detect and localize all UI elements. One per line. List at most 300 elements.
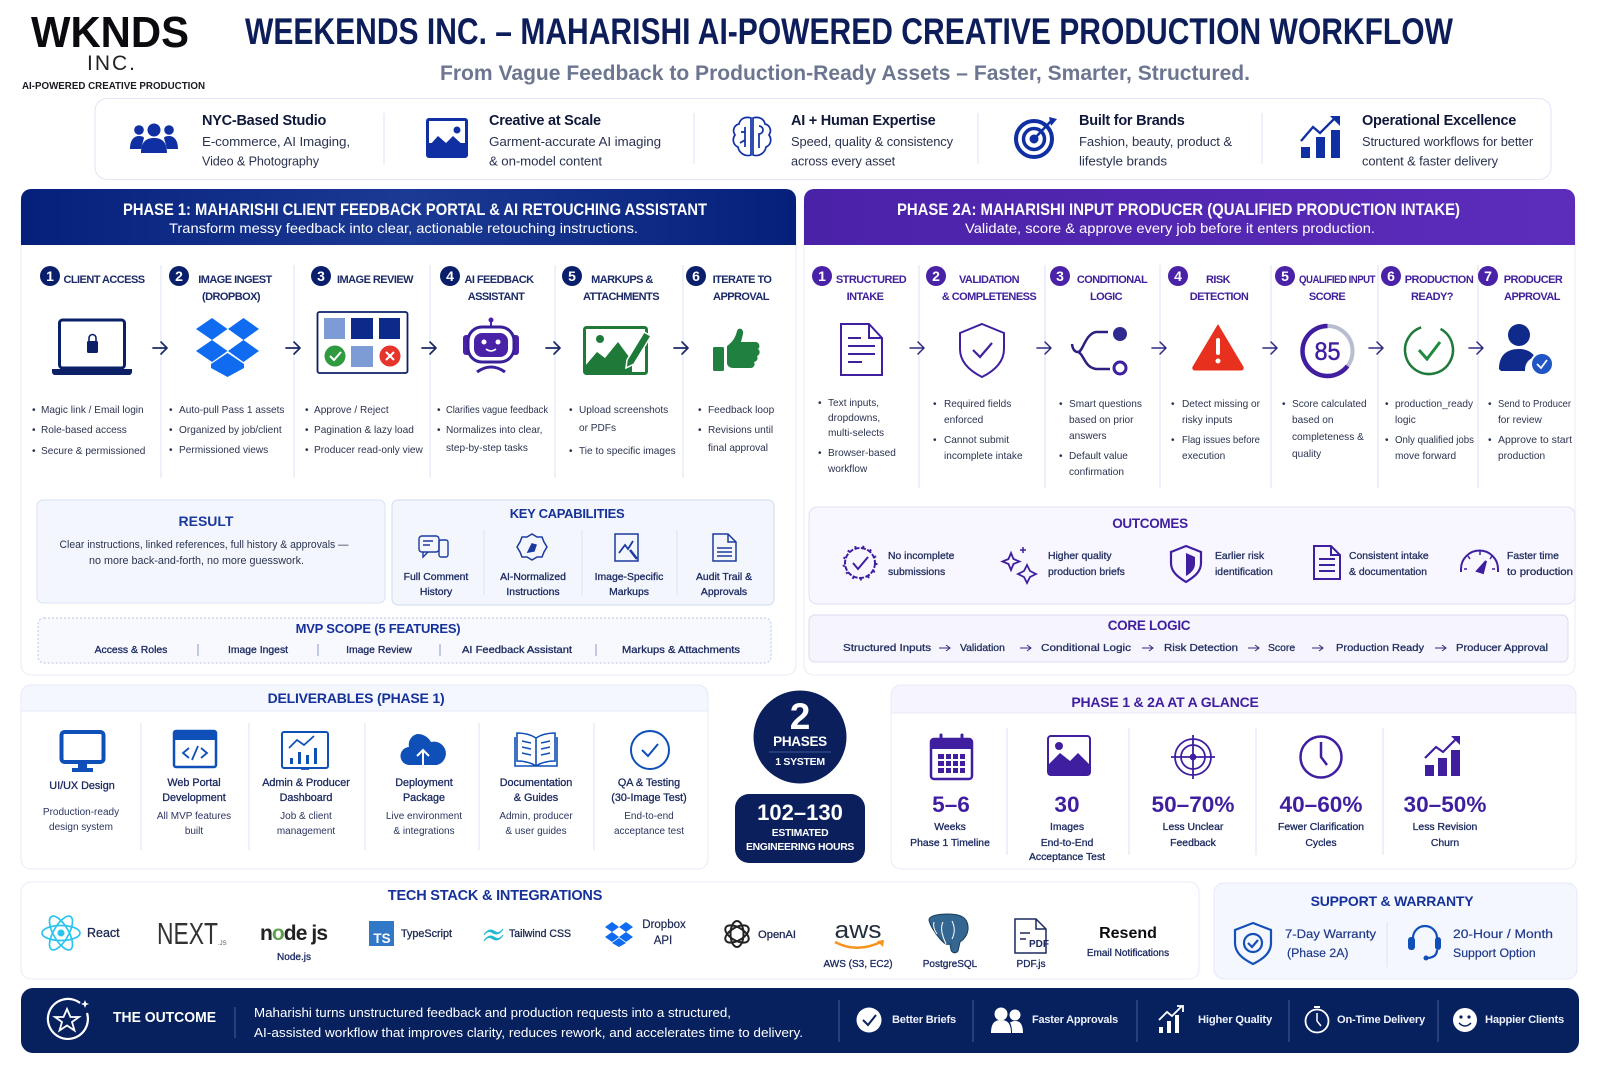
- deliverable: admin and producer dashboard: Job & client: [280, 811, 332, 822]
- stat: 30 images: [1029, 736, 1105, 863]
- outcome statement: AI-assisted workflow that improves clarity, reduces rework, and accelerates time to delivery.: [254, 1025, 803, 1040]
- core logic box: [809, 615, 1568, 662]
- step 2: image ingest: 2: [175, 268, 183, 284]
- producer approval features: for review: [1498, 415, 1542, 426]
- producer approval features: •: [1488, 399, 1492, 410]
- client access features: Role-based access: [41, 425, 127, 436]
- stat: 50-70 percent: [1152, 735, 1234, 849]
- text: built for brands: Fashion, beauty, product &: [1079, 135, 1233, 149]
- AI feedback features: Normalizes into clear,: [446, 425, 542, 436]
- step 2: image ingest: [169, 266, 284, 456]
- score features: [1282, 399, 1367, 460]
- logo: AWS: AWS (S3, EC2): [823, 959, 893, 970]
- structured intake features: [818, 398, 896, 475]
- deliverable: QA and testing: [611, 731, 687, 837]
- result box: RESULT: [179, 513, 234, 529]
- AI feedback features: step-by-step tasks: [446, 443, 528, 454]
- core logic box: Conditional Logic: [1041, 643, 1131, 654]
- stat: 50-70 percent: Feedback: [1170, 838, 1217, 849]
- image review features: •: [305, 445, 309, 456]
- logo: INC.: [87, 52, 137, 75]
- logo: PDF.js: [1015, 919, 1049, 970]
- step 4: AI feedback assistant: [437, 266, 549, 454]
- deliverable: documentation and guides: Documentation: [500, 777, 572, 789]
- conditional logic features: answers: [1069, 431, 1107, 442]
- stat: 50-70 percent: Less Unclear: [1163, 822, 1224, 833]
- support option: Support Option: [1453, 946, 1536, 960]
- support option: 20-Hour / Month: [1453, 927, 1553, 941]
- step 6: production ready: READY?: [1411, 291, 1454, 303]
- logo: Tailwind CSS: Tailwind CSS: [509, 928, 571, 940]
- text: operational excellence: content & faster delivery: [1362, 154, 1499, 168]
- text: built for brands: Built for Brands: [1079, 113, 1185, 129]
- image review features: Approve / Reject: [314, 405, 389, 416]
- badge: 2 phases 1 system: 1 SYSTEM: [775, 756, 825, 768]
- arrow: [153, 342, 167, 354]
- phase 1 header: [21, 189, 796, 245]
- step 6: iterate to approval: [686, 266, 775, 454]
- benefit: better briefs: [856, 1008, 956, 1032]
- structured intake features: workflow: [827, 464, 868, 475]
- icon: brain: [733, 117, 771, 156]
- panel: phase 1: [21, 189, 796, 675]
- step 3: image review: IMAGE REVIEW: [337, 274, 414, 286]
- iterate features: Revisions until: [708, 425, 773, 436]
- logo: Node.js: node js: [260, 922, 328, 945]
- production ready features: Only qualified jobs: [1395, 435, 1474, 446]
- step 1: client access: [32, 266, 145, 457]
- logo: TypeScript: TypeScript: [401, 928, 452, 940]
- text: AI plus human expertise: Speed, quality & consistency: [791, 135, 954, 149]
- icon: shield: [960, 324, 1004, 377]
- step 3: conditional logic: 3: [1056, 268, 1064, 284]
- text: operational excellence: [1362, 113, 1533, 168]
- core logic box: Validation: [960, 643, 1005, 654]
- icon: dropbox: [196, 318, 259, 377]
- validation features: •: [933, 399, 937, 410]
- step 3: conditional logic: CONDITIONAL: [1077, 274, 1148, 286]
- badge: estimated engineering hours: ENGINEERING HOURS: [746, 842, 854, 853]
- AI feedback features: •: [437, 405, 441, 416]
- phase 2A header: Validate, score & approve every job before it enters production.: [965, 220, 1375, 236]
- markups features: [569, 405, 676, 457]
- result box: no more back-and-forth, no more guesswork.: [89, 555, 304, 567]
- icon: image: [426, 118, 468, 158]
- stat: 40-60 percent: Cycles: [1305, 838, 1337, 849]
- step 4: risk detection: 4: [1174, 268, 1182, 284]
- deliverable: deployment package: & integrations: [393, 826, 455, 837]
- deliverable: web portal development: [157, 731, 231, 837]
- image review features: •: [305, 405, 309, 416]
- step 2: image ingest: (DROPBOX): [202, 291, 261, 303]
- warranty: 7-Day Warranty: [1285, 927, 1377, 941]
- step 6: iterate to approval: 6: [692, 268, 700, 284]
- deliverable: deployment package: Deployment: [395, 777, 453, 789]
- structured intake features: •: [818, 448, 822, 459]
- step 5: markups and attachments: ATTACHMENTS: [583, 291, 659, 303]
- arrow: [1263, 342, 1277, 354]
- icon: green check circle: [1396, 317, 1462, 383]
- score features: Score calculated: [1292, 399, 1367, 410]
- outcome: earlier risk identification: Earlier risk: [1215, 551, 1265, 562]
- conditional logic features: based on prior: [1069, 415, 1134, 426]
- text: AI plus human expertise: AI + Human Expertise: [791, 113, 936, 129]
- outcome: higher quality production briefs: [1002, 547, 1125, 583]
- conditional logic features: Smart questions: [1069, 399, 1142, 410]
- outcome statement: [254, 1005, 803, 1040]
- markups features: •: [569, 405, 573, 416]
- arrow: [674, 342, 688, 354]
- capability: audit trail and approvals: [696, 534, 752, 598]
- support option: [1408, 926, 1553, 960]
- logo: Resend: [1087, 925, 1169, 959]
- logo: Dropbox API: [605, 919, 686, 947]
- text: built for brands: lifestyle brands: [1079, 154, 1167, 168]
- stat: 5-6 weeks: [910, 735, 990, 849]
- outcome: faster time to production: [1461, 550, 1573, 578]
- deliverable: admin and producer dashboard: management: [277, 826, 335, 837]
- risk detection features: risky inputs: [1182, 415, 1232, 426]
- text: NYC-based studio: Video & Photography: [202, 154, 320, 168]
- logo: Tailwind CSS: [484, 928, 571, 941]
- panel: deliverables: [21, 685, 708, 869]
- core logic box: Risk Detection: [1164, 643, 1238, 654]
- step 5: qualified input score: SCORE: [1309, 291, 1345, 303]
- production ready features: move forward: [1395, 451, 1456, 462]
- deliverable: QA and testing: (30-Image Test): [611, 792, 687, 804]
- image ingest features: •: [169, 445, 173, 456]
- production ready features: production_ready: [1395, 399, 1474, 410]
- step 5: qualified input score: [1275, 266, 1376, 460]
- icon: growth chart: [1301, 116, 1340, 158]
- markups features: •: [569, 446, 573, 457]
- logo: AWS: aws: [834, 917, 882, 944]
- benefit: higher quality: [1159, 1006, 1273, 1033]
- outcome: faster time to production: Faster time: [1507, 551, 1559, 562]
- step 6: iterate to approval: ITERATE TO: [713, 274, 772, 286]
- logo: TypeScript: TS: [373, 931, 391, 946]
- capability: audit trail and approvals: Approvals: [701, 587, 747, 598]
- outcome: higher quality production briefs: production briefs: [1048, 567, 1125, 578]
- step 3: conditional logic: [1050, 266, 1148, 478]
- text: AI plus human expertise: [791, 113, 954, 168]
- image ingest features: •: [169, 405, 173, 416]
- client access features: Secure & permissioned: [41, 446, 145, 457]
- conditional logic features: •: [1059, 451, 1063, 462]
- image ingest features: Organized by job/client: [179, 425, 282, 436]
- capability: AI-normalized instructions: Instructions: [506, 587, 560, 598]
- text: NYC-based studio: [202, 113, 350, 168]
- capability: AI-normalized instructions: AI-Normalized: [500, 572, 566, 583]
- step 3: image review: 3: [317, 268, 325, 284]
- text: NYC-based studio: E-commerce, AI Imaging,: [202, 135, 350, 149]
- deliverable: deployment package: [386, 734, 462, 837]
- icon: laptop: [52, 320, 132, 375]
- iterate features: •: [698, 425, 702, 436]
- production ready features: •: [1385, 435, 1389, 446]
- MVP scope: AI Feedback Assistant: [462, 645, 572, 656]
- deliverable: web portal development: Development: [162, 792, 226, 804]
- outcome: faster time to production: to production: [1507, 567, 1573, 578]
- subtitle: From Vague Feedback to Production-Ready Assets – Faster, Smarter, Structured.: [440, 62, 1250, 85]
- step 4: AI feedback assistant: AI FEEDBACK: [464, 274, 534, 286]
- text: operational excellence: Operational Excellence: [1362, 113, 1516, 129]
- production ready features: •: [1385, 399, 1389, 410]
- stat: 30 images: 30: [1054, 792, 1080, 817]
- panel: the outcome: [21, 988, 1579, 1053]
- step 4: risk detection: RISK: [1206, 274, 1231, 286]
- text: creative at scale: [489, 113, 661, 168]
- image ingest features: •: [169, 425, 173, 436]
- benefit: on-time delivery: On-Time Delivery: [1337, 1014, 1426, 1026]
- panel: deliverables: DELIVERABLES (PHASE 1): [268, 690, 444, 706]
- step 6: production ready: [1381, 266, 1474, 462]
- logo: Node.js: [260, 922, 328, 963]
- deliverable: admin and producer dashboard: [262, 732, 350, 837]
- risk detection features: •: [1171, 399, 1175, 410]
- step 4: risk detection: DETECTION: [1190, 291, 1249, 303]
- logo: AWS: [823, 917, 893, 970]
- validation features: enforced: [944, 415, 983, 426]
- capability: full comment history: [404, 536, 468, 598]
- conditional logic features: Default value: [1069, 451, 1128, 462]
- image review features: •: [305, 425, 309, 436]
- outcomes box: OUTCOMES: [1112, 516, 1188, 531]
- MVP scope: Markups & Attachments: [622, 645, 740, 656]
- icon: approved person: [1499, 324, 1553, 375]
- validation features: Required fields: [944, 399, 1011, 410]
- benefit: on-time delivery: [1306, 1007, 1426, 1032]
- logo: Dropbox API: API: [654, 935, 672, 947]
- result box: [37, 500, 385, 603]
- text: NYC-based studio: NYC-Based Studio: [202, 113, 326, 129]
- deliverable: UI/UX design: [43, 732, 119, 833]
- step 1: structured intake: INTAKE: [847, 291, 884, 303]
- arrow: [1469, 342, 1483, 354]
- panel: company highlights: [95, 98, 1551, 180]
- stat: 30 images: Images: [1050, 822, 1084, 833]
- panel: tech stack and integrations: [21, 882, 1199, 979]
- deliverable: QA and testing: QA & Testing: [618, 777, 680, 789]
- step 2: validation and completeness: 2: [932, 268, 940, 284]
- icon: warning triangle: [1193, 325, 1243, 370]
- stat: 30-50 percent: Churn: [1431, 838, 1459, 849]
- AI feedback features: Clarifies vague feedback: [446, 405, 549, 416]
- producer approval features: [1488, 399, 1572, 462]
- stat: 30-50 percent: [1404, 736, 1486, 849]
- MVP scope: MVP SCOPE (5 FEATURES): [296, 621, 460, 636]
- producer approval features: •: [1488, 435, 1492, 446]
- step 6: production ready: 6: [1387, 268, 1395, 284]
- logo: PostgreSQL: [923, 914, 978, 970]
- step 7: producer approval: [1478, 266, 1572, 462]
- benefit: higher quality: Higher Quality: [1198, 1014, 1273, 1026]
- step 3: conditional logic: LOGIC: [1090, 291, 1123, 303]
- benefit: happier clients: [1453, 1008, 1564, 1032]
- image ingest features: [169, 405, 284, 456]
- score features: based on: [1292, 415, 1334, 426]
- iterate features: •: [698, 405, 702, 416]
- structured intake features: Browser-based: [828, 448, 896, 459]
- logo: WKNDS: [31, 8, 189, 57]
- logo: React: React: [87, 926, 120, 940]
- outcome: no incomplete submissions: [844, 546, 955, 580]
- deliverable: deployment package: Live environment: [386, 811, 462, 822]
- arrow: [1037, 342, 1051, 354]
- structured intake features: Text inputs,: [828, 398, 879, 409]
- badge: 2 phases 1 system: PHASES: [773, 734, 827, 749]
- phase 1 header: Transform messy feedback into clear, actionable retouching instructions.: [169, 220, 638, 236]
- phase 1 header: PHASE 1: MAHARISHI CLIENT FEEDBACK PORTAL & AI RETOUCHING ASSISTANT: [123, 200, 707, 219]
- stat: 40-60 percent: Fewer Clarification: [1278, 822, 1364, 833]
- validation features: [933, 399, 1023, 462]
- arrow: [422, 342, 436, 354]
- capability: image-specific markups: Markups: [609, 587, 649, 598]
- stat: 40-60 percent: 40–60%: [1280, 792, 1362, 817]
- validation features: •: [933, 435, 937, 446]
- producer approval features: Send to Producer: [1498, 399, 1572, 410]
- validation features: Cannot submit: [944, 435, 1009, 446]
- key capabilities: [392, 500, 774, 605]
- deliverable: UI/UX design: Production-ready: [43, 807, 119, 818]
- image review features: [305, 405, 424, 456]
- benefit: faster approvals: Faster Approvals: [1032, 1014, 1118, 1026]
- text: creative at scale: Creative at Scale: [489, 113, 601, 129]
- deliverable: QA and testing: End-to-end: [624, 811, 674, 822]
- icon: review grid: [318, 312, 408, 373]
- step 1: client access: CLIENT ACCESS: [63, 274, 145, 286]
- iterate features: final approval: [708, 443, 768, 454]
- logo: PDF.js: PDF: [1029, 939, 1049, 950]
- producer approval features: Approve to start: [1498, 435, 1572, 446]
- step 3: image review: [305, 266, 424, 456]
- MVP scope: Access & Roles: [95, 645, 167, 656]
- logo: OpenAI: OpenAI: [758, 929, 796, 941]
- outcome: consistent intake and documentation: & documentation: [1349, 567, 1427, 578]
- gauge: score 85: 85: [1314, 338, 1340, 366]
- structured intake features: •: [818, 398, 822, 409]
- outcome: no incomplete submissions: No incomplete: [888, 551, 955, 562]
- badge: estimated engineering hours: 102–130: [757, 800, 843, 825]
- result box: Clear instructions, linked references, full history & approvals —: [60, 539, 348, 551]
- outcomes box: [809, 507, 1575, 604]
- image ingest features: Permissioned views: [179, 445, 268, 456]
- panel: tech stack and integrations: TECH STACK & INTEGRATIONS: [388, 888, 603, 904]
- logo: Node.js: Node.js: [277, 952, 311, 963]
- core logic box: Production Ready: [1336, 643, 1425, 654]
- client access features: Magic link / Email login: [41, 405, 144, 416]
- conditional logic features: confirmation: [1069, 467, 1124, 478]
- arrow: [910, 342, 924, 354]
- risk detection features: •: [1171, 435, 1175, 446]
- step 2: validation and completeness: VALIDATION: [959, 274, 1020, 286]
- iterate features: Feedback loop: [708, 405, 775, 416]
- logo: TypeScript: [369, 921, 452, 946]
- outcome: higher quality production briefs: Higher quality: [1048, 551, 1112, 562]
- step 2: validation and completeness: & COMPLETENESS: [942, 291, 1036, 303]
- outcome: consistent intake and documentation: Consistent intake: [1349, 551, 1429, 562]
- text: creative at scale: & on-model content: [489, 154, 603, 168]
- outcome: consistent intake and documentation: [1314, 546, 1429, 579]
- MVP scope: [38, 618, 771, 663]
- stat: 5-6 weeks: 5–6: [932, 792, 970, 817]
- step 1: structured intake: STRUCTURED: [836, 274, 907, 286]
- deliverable: documentation and guides: & user guides: [505, 826, 567, 837]
- MVP scope: Image Ingest: [228, 645, 288, 656]
- outcome: earlier risk identification: [1171, 546, 1273, 582]
- text: operational excellence: Structured workflows for better: [1362, 135, 1533, 149]
- core logic box: Producer Approval: [1456, 643, 1548, 654]
- icon: star ring: [48, 999, 89, 1039]
- stat: 40-60 percent: [1278, 736, 1364, 849]
- deliverable: web portal development: Web Portal: [167, 777, 221, 789]
- step 5: markups and attachments: [562, 266, 676, 457]
- capability: AI-normalized instructions: [500, 534, 566, 598]
- logo: Resend: Email Notifications: [1087, 948, 1169, 959]
- panel: support and warranty: SUPPORT & WARRANTY: [1311, 893, 1474, 909]
- production ready features: logic: [1395, 415, 1416, 426]
- stat: 30 images: Acceptance Test: [1029, 852, 1105, 863]
- badge: 2 phases 1 system: [754, 690, 846, 784]
- deliverable: web portal development: All MVP features: [157, 811, 231, 822]
- client access features: [32, 405, 145, 457]
- deliverable: UI/UX design: UI/UX Design: [49, 780, 115, 792]
- markups features: Upload screenshots: [579, 405, 668, 416]
- icon: thumbs up: [713, 329, 760, 371]
- risk detection features: execution: [1182, 451, 1225, 462]
- icon: target: [1016, 117, 1057, 157]
- logo: Next.js: .JS: [218, 941, 227, 947]
- step 5: qualified input score: 5: [1281, 268, 1289, 284]
- production ready features: [1385, 399, 1474, 462]
- score features: completeness &: [1292, 432, 1364, 443]
- deliverable: admin and producer dashboard: Dashboard: [280, 792, 332, 804]
- deliverable: documentation and guides: & Guides: [514, 792, 559, 804]
- core logic box: Structured Inputs: [843, 643, 931, 654]
- icon: image with pen: [584, 328, 651, 374]
- step 2: validation and completeness: [926, 266, 1036, 462]
- panel: support and warranty: [1214, 883, 1577, 979]
- outcome statement: Maharishi turns unstructured feedback and production requests into a structured,: [254, 1005, 731, 1020]
- stat: 30-50 percent: 30–50%: [1404, 792, 1486, 817]
- benefit: faster approvals: [991, 1008, 1118, 1033]
- step 1: structured intake: 1: [818, 268, 826, 284]
- key capabilities: KEY CAPABILITIES: [510, 506, 625, 521]
- icon: people: [130, 124, 178, 153]
- core logic box: CORE LOGIC: [1108, 618, 1191, 633]
- stat: 30-50 percent: Less Revision: [1413, 822, 1478, 833]
- arrow: [1152, 342, 1166, 354]
- step 6: production ready: PRODUCTION: [1405, 274, 1474, 286]
- step 1: structured intake: [812, 266, 907, 475]
- logo: Resend: Resend: [1099, 925, 1157, 942]
- stat: 30 images: End-to-End: [1041, 838, 1094, 849]
- panel: phase 1 and 2A at a glance: PHASE 1 & 2A AT A GLANCE: [1071, 694, 1259, 710]
- producer approval features: production: [1498, 451, 1545, 462]
- logo: PDF.js: PDF.js: [1017, 959, 1045, 970]
- logo: React: [42, 913, 120, 953]
- logo: PostgreSQL: PostgreSQL: [923, 959, 978, 970]
- image review features: Producer read-only view: [314, 445, 424, 456]
- step 7: producer approval: APPROVAL: [1504, 291, 1561, 303]
- text: creative at scale: Garment-accurate AI imaging: [489, 135, 661, 149]
- capability: image-specific markups: Image-Specific: [595, 572, 663, 583]
- AI feedback features: [437, 405, 549, 454]
- benefit: better briefs: Better Briefs: [892, 1014, 956, 1026]
- structured intake features: multi-selects: [828, 428, 884, 439]
- conditional logic features: •: [1059, 399, 1063, 410]
- deliverable: documentation and guides: Admin, producer: [499, 811, 573, 822]
